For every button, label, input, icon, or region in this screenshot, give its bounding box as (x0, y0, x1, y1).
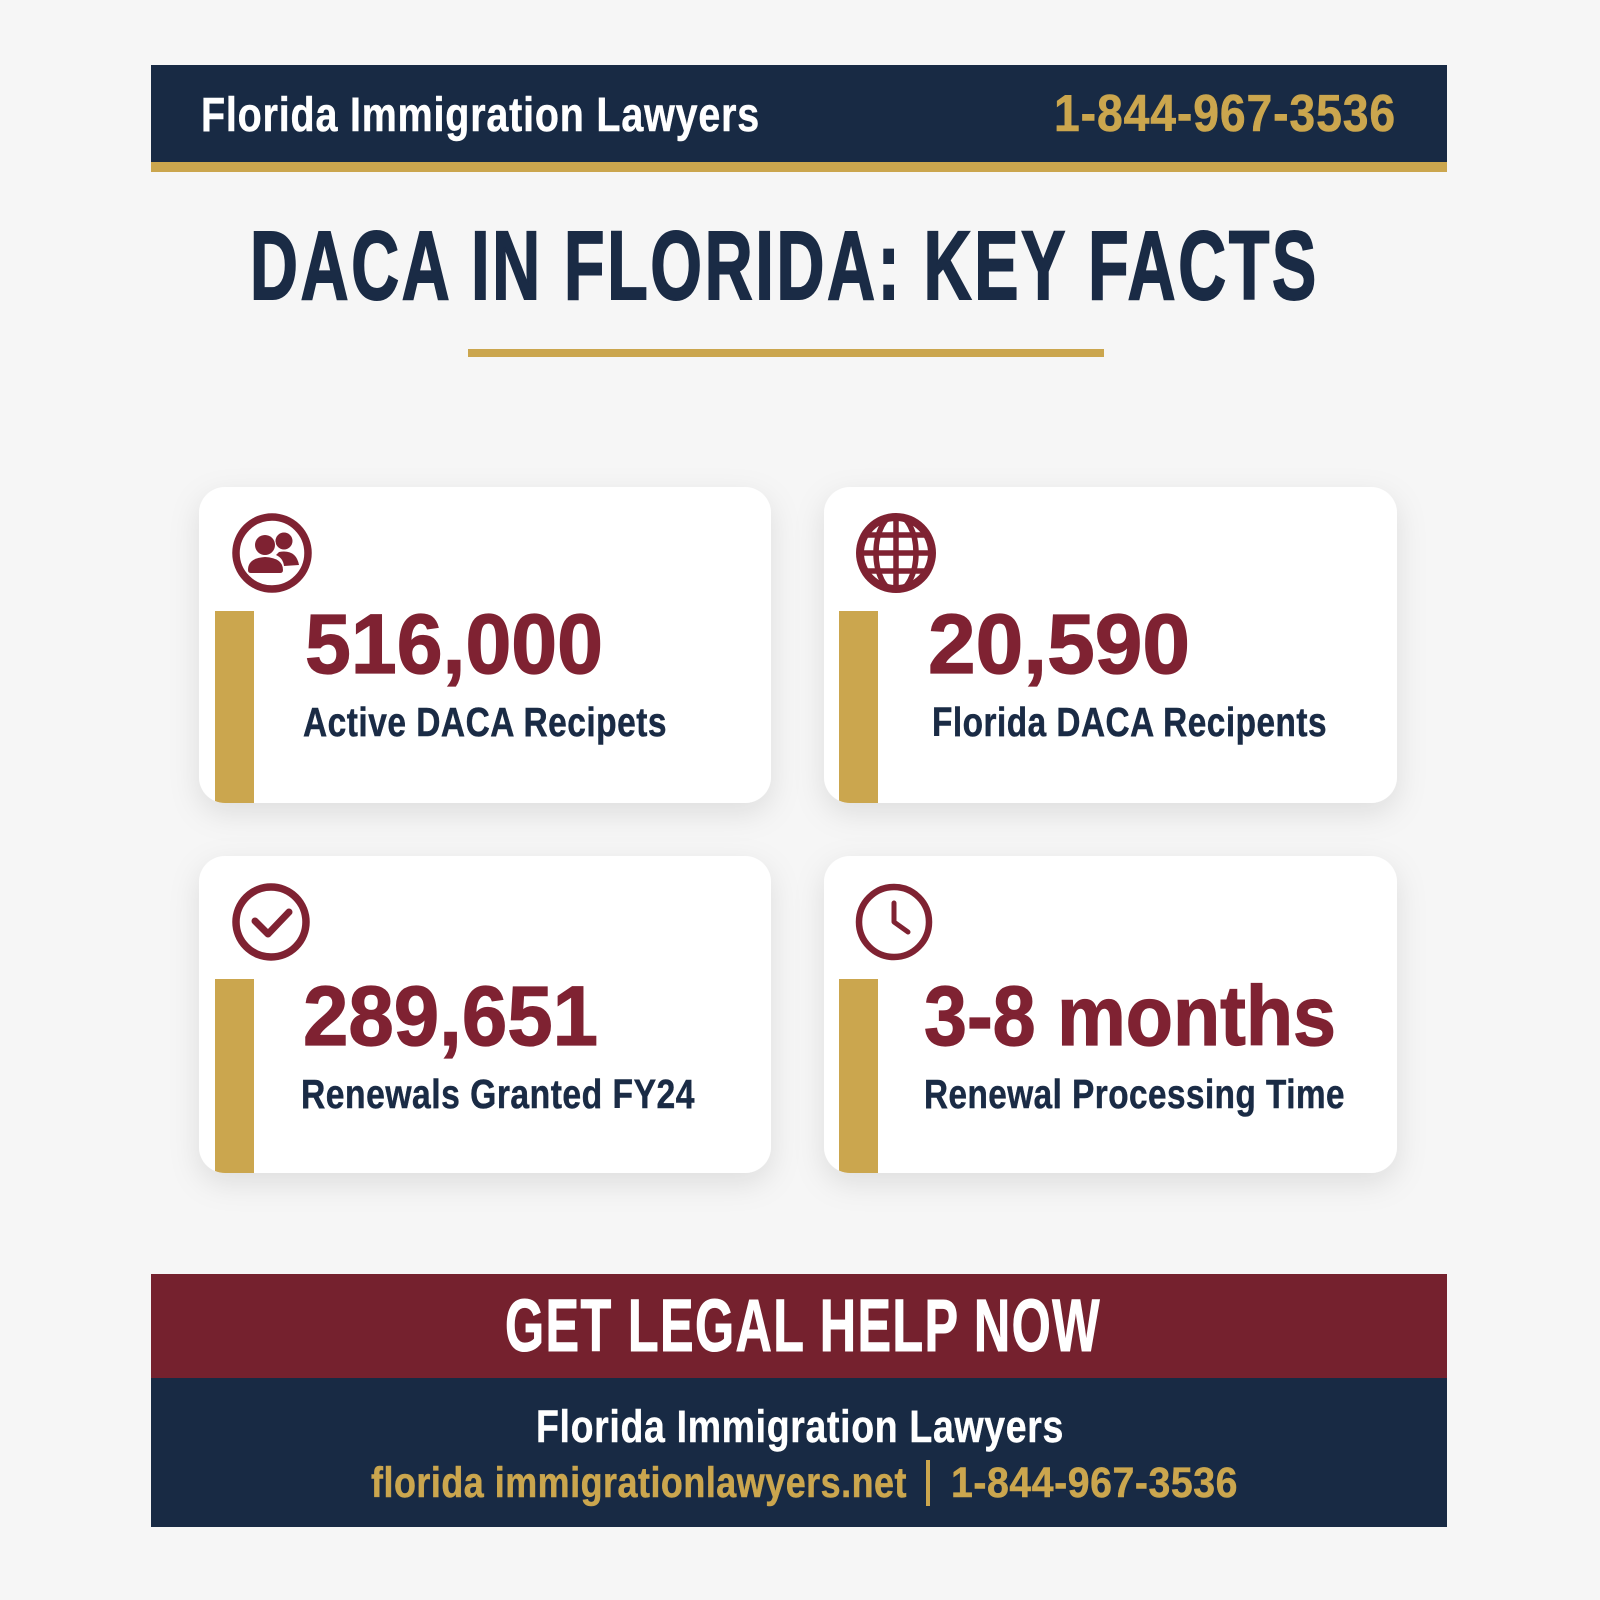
stat label: Renewals Granted FY24 (301, 1071, 695, 1117)
accent bar (215, 611, 254, 803)
card: processing time (824, 856, 1397, 1173)
accent bar (839, 611, 878, 803)
stat label: Renewal Processing Time (924, 1071, 1345, 1117)
banner heading: GET LEGAL HELP NOW (505, 1284, 1101, 1367)
stat value: 516,000 (305, 597, 603, 691)
stat label: Florida DACA Recipents (932, 699, 1327, 745)
card: renewals granted (199, 856, 771, 1173)
stat value: 20,590 (928, 597, 1190, 691)
call to action banner (151, 1274, 1447, 1378)
card: active DACA recipients (199, 487, 771, 803)
footer phone number: 1-844-967-3536 (951, 1459, 1238, 1507)
accent bar (215, 979, 254, 1173)
stat label: Active DACA Recipets (303, 699, 667, 745)
footer separator (926, 1460, 930, 1506)
accent bar (839, 979, 878, 1173)
footer contact panel (151, 1378, 1447, 1527)
icon: globe (856, 513, 936, 593)
stat value: 3-8 months (924, 969, 1336, 1063)
infographic (151, 65, 1447, 1527)
header firm name: Florida Immigration Lawyers (201, 89, 760, 142)
title underline (468, 349, 1104, 357)
footer firm name: Florida Immigration Lawyers (536, 1401, 1064, 1452)
card: Florida DACA recipients (824, 487, 1397, 803)
top header bar (151, 65, 1447, 172)
stat value: 289,651 (303, 969, 598, 1063)
icon: clock (859, 887, 929, 957)
icon: people (236, 517, 308, 589)
header phone number: 1-844-967-3536 (1054, 85, 1396, 143)
icon: check mark (236, 887, 306, 957)
footer website: florida immigrationlawyers.net (371, 1459, 907, 1507)
